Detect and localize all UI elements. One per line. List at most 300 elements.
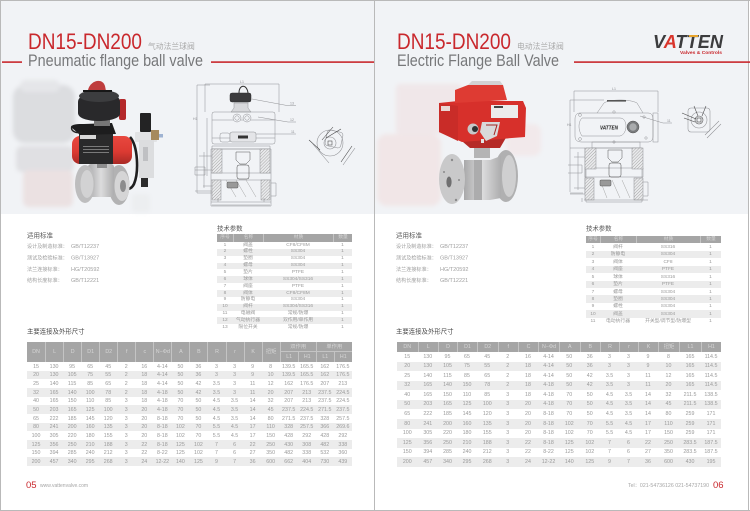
table: parts list: CF8/CF8M [286, 243, 310, 248]
drawing callout numbers: H1 [193, 117, 198, 121]
table: parts list: 11 [590, 319, 595, 324]
table: pneumatic dimensions: 75 [87, 372, 93, 378]
table: pneumatic dimensions: 50 [33, 407, 39, 413]
standards list [396, 243, 468, 284]
table: parts list: 3 [224, 256, 226, 261]
table: pneumatic dimensions: B [197, 349, 201, 355]
table: pneumatic dimensions: 20 [141, 433, 147, 439]
table: pneumatic dimensions: 237.5 [318, 398, 331, 404]
table: pneumatic dimensions: 78 [105, 390, 111, 396]
table: electric dimensions: 17 [645, 421, 651, 427]
table: pneumatic dimensions: 2 [125, 364, 128, 370]
table: electric dimensions: 4.5 [625, 430, 632, 436]
table: electric dimensions: 259 [686, 430, 694, 436]
table: pneumatic dimensions: 6 [233, 450, 236, 456]
black hose [122, 137, 137, 189]
leader line [640, 116, 672, 123]
table: electric dimensions: D1 [464, 344, 471, 350]
table: parts list: 1 [709, 312, 712, 317]
table: electric dimensions: 150 [463, 382, 471, 388]
dimension lines [197, 84, 279, 193]
right page bottom edge [375, 510, 750, 511]
table: parts list: SS304 [661, 297, 675, 302]
table: pneumatic dimensions: 120 [104, 416, 113, 422]
table: electric dimensions: 185 [443, 411, 452, 417]
table: electric dimensions: 165 [423, 382, 432, 388]
table: pneumatic dimensions: H1 [304, 354, 311, 360]
table: pneumatic dimensions: 27 [250, 450, 256, 456]
table: parts list: 常规/防爆 [288, 325, 308, 330]
table: parts list: 1 [341, 277, 344, 282]
table: parts list: 1 [224, 243, 226, 248]
table: parts list: 1 [709, 267, 712, 272]
table: parts list: 2 [592, 252, 594, 257]
red rule left [2, 61, 22, 63]
standards list: HG/T20592 [440, 267, 468, 273]
table: parts list: 阀体 [613, 260, 623, 265]
table: parts list: 双作用/单作用 [283, 318, 313, 323]
table: pneumatic dimensions: 360 [338, 450, 347, 456]
logo: Vatten: VATTEN [653, 32, 724, 52]
table: electric dimensions: 70 [587, 430, 593, 436]
table: parts list: SS304/SS316 [283, 304, 313, 309]
table: parts list: 1 [341, 249, 344, 254]
table: electric dimensions [397, 342, 721, 467]
table: parts list: 防静电 [611, 252, 625, 257]
table: pneumatic dimensions: 12 [268, 381, 274, 387]
table: parts list: 球体 [613, 275, 623, 280]
table: parts list: 1 [709, 297, 712, 302]
table: pneumatic dimensions: 7 [233, 459, 236, 465]
table: pneumatic dimensions: 110 [266, 424, 275, 430]
left page bottom edge [0, 510, 375, 511]
table: pneumatic dimensions: 212 [104, 450, 113, 456]
table: pneumatic dimensions: 140 [176, 459, 185, 465]
table: parts list: 阀座 [243, 284, 253, 289]
table: pneumatic dimensions: 130 [50, 372, 58, 378]
table: pneumatic dimensions: 439 [338, 459, 347, 465]
table: electric dimensions: 305 [423, 430, 432, 436]
table: pneumatic dimensions: 70 [195, 433, 201, 439]
table: electric dimensions: 50 [404, 401, 410, 407]
table: electric dimensions: 600 [664, 459, 673, 465]
actuator body [575, 113, 653, 142]
table: electric dimensions: 3 [506, 430, 509, 436]
ball and stem [236, 152, 250, 164]
table: electric dimensions: 65 [464, 354, 470, 360]
table: electric dimensions: N−Φd [542, 344, 556, 350]
table: pneumatic dimensions: N−Φd [156, 349, 170, 355]
table: electric dimensions: 50 [566, 382, 572, 388]
table: pneumatic dimensions: f [126, 349, 128, 355]
technical drawing: electric valve [567, 87, 672, 202]
table: pneumatic dimensions: 3 [125, 416, 128, 422]
left flange [75, 165, 95, 203]
table: electric dimensions: 102 [585, 440, 594, 446]
solenoid [220, 133, 230, 142]
table: pneumatic dimensions: 237.5 [300, 416, 313, 422]
table: electric dimensions: 80 [666, 411, 671, 417]
table: electric dimensions: R [608, 344, 612, 350]
drawing callout numbers [193, 80, 295, 134]
table: electric dimensions: 4-14 [543, 363, 554, 369]
table: pneumatic dimensions: 328 [284, 424, 293, 430]
table: electric dimensions: 203 [423, 401, 432, 407]
table: pneumatic dimensions: 32 [268, 398, 274, 404]
table: electric dimensions: 3 [627, 382, 630, 388]
table: pneumatic dimensions: 207 [284, 390, 293, 396]
table: pneumatic dimensions: 扭矩 [266, 349, 276, 355]
table: electric dimensions: 295 [463, 459, 471, 465]
table: parts list: 名称 [614, 237, 623, 242]
drawing callout numbers: L1 [612, 87, 616, 91]
table: pneumatic dimensions: 3 [215, 364, 218, 370]
table: electric dimensions: 70 [587, 421, 593, 427]
table: electric dimensions: 50 [566, 363, 572, 369]
table: parts list [586, 236, 721, 324]
table: parts list: 1 [341, 270, 344, 275]
table: pneumatic dimensions: 185 [68, 416, 77, 422]
table: electric dimensions: 50 [587, 401, 593, 407]
table: electric dimensions: 187.5 [704, 440, 718, 446]
table: parts list: 阀盖 [613, 312, 623, 317]
table: pneumatic dimensions: 3.5 [231, 416, 238, 422]
table: electric dimensions: 65 [484, 373, 490, 379]
table: electric dimensions: 16 [525, 354, 531, 360]
table: electric dimensions: 42 [587, 373, 593, 379]
table: parts list: 5 [224, 270, 226, 275]
table: electric dimensions: 150 [443, 392, 452, 398]
table: electric dimensions: 36 [645, 459, 651, 465]
table: electric dimensions: 14 [645, 392, 651, 398]
table: pneumatic dimensions: 162 [284, 381, 293, 387]
icon: electric ball valve photo [439, 81, 526, 204]
table: electric dimensions: 70 [566, 401, 572, 407]
table: pneumatic dimensions: 105 [68, 372, 77, 378]
table: electric dimensions: 4.5 [606, 411, 613, 417]
table: parts list: CF8/CF8M [286, 291, 310, 296]
table: pneumatic dimensions: 3 [125, 433, 128, 439]
nameplate [491, 105, 518, 118]
table: pneumatic dimensions: 3 [233, 381, 236, 387]
heading: pneumatic title [28, 29, 203, 70]
red rule [574, 61, 750, 63]
red top lid [455, 85, 507, 103]
heading: electric title [397, 29, 564, 70]
neck [592, 142, 640, 148]
table: parts list: SS304 [291, 263, 305, 268]
table: electric dimensions: 135 [483, 421, 492, 427]
table: electric dimensions: 3.5 [625, 392, 632, 398]
table: pneumatic dimensions: 85 [105, 398, 111, 404]
faded ghost valve background [377, 84, 541, 206]
logo: Vatten: Valves & Controls [680, 50, 723, 55]
table: electric dimensions: D2 [484, 344, 491, 350]
table: parts list: SS304 [291, 297, 305, 302]
standards list: GB/T12237 [71, 244, 99, 250]
red actuator [72, 136, 132, 164]
red main housing [439, 101, 526, 142]
table: pneumatic dimensions: 17 [250, 424, 256, 430]
website: www.vattenvalve.com [40, 483, 88, 489]
table: pneumatic dimensions: 24 [141, 459, 147, 465]
table: pneumatic dimensions: 162 [320, 372, 329, 378]
table: electric dimensions: 6 [627, 440, 630, 446]
table: electric dimensions: 50 [566, 373, 572, 379]
heading: technical parameters: 技术参数 [217, 223, 243, 232]
technical drawing: electric flange top view [682, 106, 721, 138]
table: parts list: 垫圈 [243, 256, 253, 261]
table: pneumatic dimensions: 428 [284, 433, 293, 439]
table: parts list: 1 [709, 260, 712, 265]
table: parts list: SS316 [661, 245, 675, 250]
table: electric dimensions: 457 [423, 459, 432, 465]
table: pneumatic dimensions: L1 [322, 354, 328, 360]
table: pneumatic dimensions: 4.5 [231, 424, 238, 430]
table: electric dimensions: 283.5 [683, 449, 697, 455]
table: parts list: 阀杆 [243, 304, 253, 309]
table: pneumatic dimensions: 200 [68, 424, 77, 430]
table: pneumatic dimensions: 42 [195, 390, 201, 396]
valve body [88, 164, 114, 197]
table: pneumatic dimensions: 308 [302, 442, 311, 448]
table: parts list: SS304 [291, 249, 305, 254]
table: electric dimensions: 114.5 [705, 373, 717, 379]
table: electric dimensions: 95 [445, 354, 450, 360]
table: electric dimensions: 150 [664, 430, 673, 436]
table: parts list: SS304 [661, 304, 675, 309]
table: parts list: 1 [341, 325, 344, 330]
table: pneumatic dimensions: 2 [125, 381, 128, 387]
table: pneumatic dimensions: 257.5 [336, 416, 349, 422]
technical drawing: pneumatic valve [193, 80, 296, 206]
table: pneumatic dimensions: 222 [50, 416, 58, 422]
table: electric dimensions: 20 [666, 382, 671, 388]
table: electric dimensions: 3.5 [606, 373, 613, 379]
red rule right [211, 61, 374, 63]
table: electric dimensions: 18 [525, 373, 531, 379]
valve body [464, 156, 501, 200]
left page left edge [0, 0, 1, 511]
table: pneumatic dimensions: 7 [215, 442, 218, 448]
table: parts list: PTFE [292, 284, 304, 289]
table: electric dimensions: 10 [666, 363, 671, 369]
table: electric dimensions: 350 [664, 449, 673, 455]
table: parts list: SS304 [661, 290, 675, 295]
table: pneumatic dimensions: 292 [302, 433, 311, 439]
table: electric dimensions: 110 [664, 421, 673, 427]
table: electric dimensions: 45 [666, 401, 671, 407]
drawing callout numbers [567, 87, 671, 127]
table: pneumatic dimensions: 2 [125, 372, 128, 378]
actuator outline [212, 112, 275, 144]
table: electric dimensions: 扭矩 [664, 344, 674, 350]
english product name: Electric Flange Ball Valve [397, 52, 559, 70]
table: parts list: 10 [590, 312, 596, 317]
table: pneumatic dimensions: c [143, 349, 146, 355]
faded ghost valve background [13, 80, 150, 212]
panel: right page [375, 0, 750, 511]
table: pneumatic dimensions: 70 [177, 407, 183, 413]
table: pneumatic dimensions: 70 [177, 398, 183, 404]
table: pneumatic dimensions: 45 [105, 364, 111, 370]
table: parts list: PTFE [292, 270, 304, 275]
standards list: GB/T13927 [440, 256, 468, 262]
table: pneumatic dimensions: 100 [32, 433, 40, 439]
table: electric dimensions: 3.5 [625, 401, 632, 407]
table: electric dimensions: 7 [627, 459, 630, 465]
table: parts list: 螺栓 [613, 304, 623, 309]
table: pneumatic dimensions: 269.6 [336, 424, 349, 430]
table: pneumatic dimensions: 110 [86, 398, 94, 404]
heading: applicable standards: 适用标准 [27, 230, 54, 239]
table: pneumatic dimensions: 237.5 [336, 407, 349, 413]
table: electric dimensions: 165 [423, 392, 432, 398]
side box [653, 113, 658, 142]
table: pneumatic dimensions: K [251, 349, 255, 355]
table: electric dimensions: 125 [403, 440, 412, 446]
drawing callout numbers: 11 [667, 119, 671, 123]
table: pneumatic dimensions: 430 [284, 442, 293, 448]
table: electric dimensions: 9 [647, 363, 649, 369]
standards list: GB/T12221 [440, 278, 468, 284]
table: electric dimensions: 130 [423, 354, 432, 360]
table: pneumatic dimensions: 100 [104, 407, 113, 413]
table: parts list: 阀盖 [243, 243, 253, 248]
table: pneumatic dimensions: 4-18 [157, 398, 168, 404]
table: electric dimensions: 20 [404, 363, 410, 369]
table: parts list: SS304 [291, 256, 305, 261]
table: pneumatic dimensions: 3.5 [231, 407, 238, 413]
table: electric dimensions: 5.5 [606, 421, 613, 427]
table: electric dimensions: L [427, 344, 430, 350]
left page centre edge [374, 0, 375, 511]
table: pneumatic dimensions: 338 [302, 450, 311, 456]
table: pneumatic dimensions: 125 [32, 442, 40, 448]
panel: left page [0, 0, 375, 511]
table: pneumatic dimensions: 9 [215, 459, 218, 465]
table: parts list: 阀体 [243, 291, 253, 296]
standards list: GB/T13927 [71, 256, 99, 262]
table: parts list: 序号 [220, 235, 230, 240]
table: pneumatic dimensions: 18 [141, 372, 147, 378]
standards list: 测试及检验标准： [396, 254, 437, 262]
table: pneumatic dimensions: 224.5 [336, 398, 349, 404]
table: electric dimensions: 70 [566, 411, 572, 417]
table: pneumatic dimensions: 4-14 [157, 372, 168, 378]
table: pneumatic dimensions: 241 [50, 424, 58, 430]
table: pneumatic dimensions: 140 [50, 381, 58, 387]
table: pneumatic dimensions: 600 [266, 459, 275, 465]
table: electric dimensions: 125 [565, 440, 574, 446]
table: electric dimensions: 250 [443, 440, 452, 446]
table: electric dimensions: 18 [525, 363, 531, 369]
table: pneumatic dimensions: 165.5 [300, 372, 313, 378]
table: electric dimensions: 120 [483, 411, 492, 417]
table: pneumatic dimensions: 5.5 [213, 424, 220, 430]
table: electric dimensions: 50 [566, 354, 572, 360]
table: electric dimensions: 2 [506, 354, 509, 360]
table: electric dimensions: 115 [443, 373, 452, 379]
table: pneumatic dimensions: 213 [338, 381, 347, 387]
table: electric dimensions: 4-18 [543, 382, 554, 388]
table: pneumatic dimensions: 250 [68, 442, 77, 448]
table: pneumatic dimensions: 11 [250, 390, 255, 396]
table: electric dimensions: 140 [565, 459, 574, 465]
table: electric dimensions: 3 [627, 373, 630, 379]
table: pneumatic dimensions: 50 [195, 416, 201, 422]
right page header band [375, 1, 748, 214]
bolts [195, 152, 212, 191]
table: pneumatic dimensions: 237.5 [318, 390, 331, 396]
table: parts list: 1 [341, 263, 344, 268]
table: parts list: 1 [341, 318, 344, 323]
table: pneumatic dimensions: 295 [86, 459, 95, 465]
table: electric dimensions: 40 [404, 392, 410, 398]
table: pneumatic dimensions: 4.5 [213, 398, 220, 404]
table: pneumatic dimensions: DN [32, 349, 40, 355]
table: pneumatic dimensions: 224.5 [336, 390, 349, 396]
table: pneumatic dimensions: 200 [32, 459, 40, 465]
table: parts list: 1 [709, 319, 712, 324]
heading: technical parameters: 技术参数 [586, 223, 612, 232]
table: electric dimensions: 165 [686, 354, 694, 360]
table: pneumatic dimensions: 213 [302, 390, 311, 396]
table: electric dimensions: C [527, 344, 530, 350]
table: pneumatic dimensions: 80 [33, 424, 39, 430]
table: electric dimensions: 2 [506, 363, 509, 369]
table: electric dimensions: 20 [525, 430, 531, 436]
table: parts list: 1 [341, 304, 344, 309]
table: pneumatic dimensions: 20 [141, 407, 147, 413]
table: pneumatic dimensions: 50 [195, 407, 201, 413]
icon: pneumatic ball valve photo [71, 81, 163, 205]
table: pneumatic dimensions: 36 [195, 372, 201, 378]
table: pneumatic dimensions: 145 [86, 416, 95, 422]
table: parts list: 1 [341, 256, 344, 261]
standards list: 法兰连接标准： [27, 266, 63, 273]
table: parts list: PTFE [662, 282, 674, 287]
table: electric dimensions: 250 [664, 440, 673, 446]
table: electric dimensions: 36 [587, 354, 593, 360]
table: pneumatic dimensions: 50 [177, 381, 183, 387]
table: electric dimensions: 8 [667, 354, 670, 360]
table: electric dimensions: DN [403, 344, 411, 350]
table: electric dimensions: 32 [666, 392, 671, 398]
table: electric dimensions: 70 [566, 392, 572, 398]
table: electric dimensions: 3 [506, 401, 509, 407]
table: pneumatic dimensions: 20 [33, 372, 39, 378]
table: electric dimensions: 222 [423, 411, 432, 417]
table: electric dimensions: 8-18 [543, 411, 554, 417]
table: parts list: 常规/防爆 [288, 311, 308, 316]
table: pneumatic dimensions: 155 [104, 433, 113, 439]
page number: 06 [713, 480, 724, 491]
table: pneumatic dimensions: 125 [194, 459, 203, 465]
table: pneumatic dimensions: 3 [125, 424, 128, 430]
table: pneumatic dimensions: 125 [176, 442, 185, 448]
table: pneumatic dimensions: 4-14 [157, 364, 168, 370]
table: pneumatic dimensions: 4-18 [157, 390, 168, 396]
table: pneumatic dimensions: 8-18 [157, 433, 168, 439]
table: pneumatic dimensions: 350 [266, 450, 275, 456]
table: electric dimensions: 165 [686, 363, 694, 369]
table: electric dimensions: 4-18 [543, 392, 554, 398]
table: electric dimensions: 8-18 [543, 440, 554, 446]
table: pneumatic dimensions: 188 [104, 442, 113, 448]
table: pneumatic dimensions: 102 [176, 433, 185, 439]
table: pneumatic dimensions: 102 [194, 450, 203, 456]
